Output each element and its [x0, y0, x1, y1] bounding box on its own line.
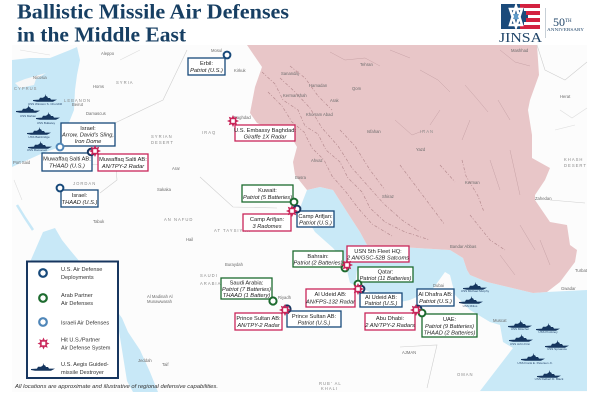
- callout: Saudi Arabia: Saudi Arabia:: [230, 280, 264, 286]
- map labels: Mosul: [211, 48, 222, 53]
- callout: Bahrain: Bahrain:: [307, 254, 329, 260]
- map labels: Tabuk: [93, 219, 105, 224]
- legend: U.S. Air Defense: [61, 267, 102, 273]
- markers: Kuwait: [286, 199, 300, 217]
- marker: Erbil: [224, 52, 230, 58]
- callout: USN 5th Fleet HQ: [346, 246, 409, 262]
- callout: Bahrain: [293, 251, 343, 267]
- map labels: Kirkuk: [234, 68, 247, 73]
- map labels: Isfahan: [367, 129, 381, 134]
- map labels: Kerman: [465, 180, 480, 185]
- map labels: Beirut: [72, 102, 84, 107]
- map labels: Dubai: [433, 283, 444, 288]
- callout: Abu Dhabi: Abu Dhabi:: [376, 316, 404, 322]
- map labels: KHASH: [564, 157, 583, 162]
- map labels: Riyadh: [278, 295, 292, 300]
- map labels: Taif: [162, 362, 169, 367]
- legend: Arab Partner: [61, 293, 93, 299]
- callout: Israel THAAD: [61, 190, 98, 207]
- map labels: DESERT: [564, 163, 587, 168]
- markers: Bahrain: [341, 259, 353, 271]
- callout: Israel THAAD: Israel:: [72, 193, 88, 199]
- callout: USN 5th Fleet HQ: USN 5th Fleet HQ:: [354, 249, 402, 255]
- callout: Erbil: Patriot (U.S.): [190, 68, 223, 74]
- callout: US Embassy Baghdad: U.S. Embassy Baghdad:: [234, 128, 296, 134]
- marker: Baghdad hit: [227, 115, 239, 127]
- callout: Prince Sultan radar: [235, 313, 282, 330]
- map labels: Yazd: [416, 147, 426, 152]
- map labels: IRAN: [420, 129, 434, 134]
- callout: Al Udeid Patriot: [360, 293, 402, 307]
- callout: Camp Arifjan Patriot: Camp Arifjan:: [298, 214, 333, 220]
- callout: Qatar: Patriot (11 Batteries): [360, 276, 411, 282]
- callout: Camp Arifjan radomes: 3 Radomes: [252, 224, 282, 230]
- map labels: AT TAYSIYAH: [214, 228, 251, 233]
- callout: Muwaffaq Salti radar: [98, 154, 148, 171]
- title: in the Middle East: [17, 22, 186, 46]
- map labels: Jeddah: [138, 358, 152, 363]
- map labels: AJMAN: [402, 350, 416, 355]
- legend: Deployments: [61, 275, 94, 281]
- map labels: Buraydah: [225, 262, 244, 267]
- ships: Gulf of Oman group: USS Spruance: [547, 347, 567, 351]
- legend: Israeli Air Defenses: [61, 320, 109, 326]
- map labels: Hamadan: [309, 83, 328, 88]
- map labels: SYRIAN: [151, 134, 173, 139]
- map labels: Port Said: [13, 160, 31, 165]
- callout: Al Udeid radar: [305, 289, 356, 307]
- map labels: LEBANON: [64, 98, 91, 103]
- callout: Kuwait: Patriot (5 Batteries): [243, 195, 292, 201]
- map labels: Arar: [172, 166, 181, 171]
- map labels: Tehran: [360, 62, 373, 67]
- callout: Erbil: Erbil:: [200, 61, 213, 67]
- marker: Saudi Arabia: [269, 297, 277, 305]
- map labels: AN NAFUD: [164, 217, 193, 222]
- ships: Mediterranean group: [16, 94, 62, 152]
- callout: USN 5th Fleet HQ: 2 AN/GSC-52B Satcoms: [346, 256, 409, 262]
- callout: Camp Arifjan radomes: Camp Arifjan:: [250, 217, 284, 223]
- callout: Qatar: [358, 267, 413, 282]
- callout: Prince Sultan Patriot: Patriot (U.S.): [298, 320, 331, 326]
- legend: U.S. Aegis Guided-: [61, 362, 109, 368]
- map labels: ARABIA: [200, 281, 221, 286]
- Mediterranean Sea: [12, 47, 80, 167]
- map labels: Turbat: [575, 268, 588, 273]
- footnote: All locations are approximate and illustrative of regional defensive capabilities.: [14, 384, 218, 390]
- logo: JINSA 50th anniversary: JINSA: [499, 30, 542, 45]
- callout: US Embassy Baghdad: [234, 125, 296, 141]
- map labels: IRAQ: [202, 130, 216, 135]
- map labels: Nicosia: [33, 75, 47, 80]
- callout: Al Udeid radar: AN/FPS-132 Radar: [305, 300, 356, 306]
- Iran terrain lines: [262, 66, 505, 250]
- map labels: SYRIA: [116, 80, 134, 85]
- markers: Prince Sultan: [279, 304, 291, 316]
- markers: Qatar: [352, 281, 364, 295]
- callout: Muwaffaq Salti radar: AN/TPY-2 Radar: [101, 164, 145, 170]
- callout: Al Dhafra: Patriot (U.S.): [419, 299, 452, 305]
- ships: Gulf of Oman group: [459, 282, 569, 381]
- ships: Mediterranean group: USS Bainbridge: [28, 135, 50, 139]
- map labels: Herat: [560, 94, 571, 99]
- callout: Camp Arifjan radomes: [243, 214, 291, 231]
- map labels: OMAN: [457, 372, 474, 377]
- callout: Muwaffaq Salti THAAD: Muwaffaq Salti AB:: [43, 156, 91, 162]
- callout: Muwaffaq Salti THAAD: THAAD (U.S.): [49, 164, 85, 170]
- map labels: Bahrain: [332, 262, 347, 267]
- callout: Israel Arrow: Iron Dome: [75, 139, 101, 145]
- callout: Saudi Arabia: THAAD (1 Battery): [223, 293, 270, 299]
- map labels: Al Madinah Al: [147, 294, 173, 299]
- callout: Kuwait: Kuwait:: [258, 188, 277, 194]
- callout: Kuwait: [242, 185, 293, 202]
- Persian Gulf and Gulf of Oman: [300, 187, 587, 391]
- callout: Camp Arifjan Patriot: Patriot (U.S.): [299, 220, 332, 226]
- map labels: DESERT: [151, 140, 174, 145]
- map labels: JORDAN: [73, 181, 96, 186]
- callout: Muwaffaq Salti THAAD: [42, 153, 92, 171]
- ships: Gulf of Oman group: USS Delbert D. Black: [535, 377, 564, 381]
- markers: UAE: [410, 304, 425, 316]
- callout: Al Dhafra: Al Dhafra AB:: [418, 292, 453, 298]
- ships: Gulf of Oman group: USS Mitscher: [511, 327, 529, 331]
- legend: missile Destroyer: [61, 370, 104, 376]
- callout: Al Udeid Patriot: Patriot (U.S.): [365, 301, 398, 307]
- title: [17, 0, 289, 46]
- map labels: Bandar Abbas: [450, 244, 476, 249]
- callout: UAE: [422, 314, 477, 337]
- map labels: KHALI: [321, 386, 338, 391]
- map labels: Homs: [93, 84, 104, 89]
- Cyprus: [15, 73, 46, 88]
- map labels: Sakaka: [157, 187, 172, 192]
- logo: JINSA 50th anniversary: 50: [553, 15, 565, 29]
- callout: Al Udeid Patriot: Al Udeid AB:: [365, 295, 397, 301]
- map labels: Basra: [295, 175, 307, 180]
- callout: Israel Arrow: Israel:: [80, 126, 96, 132]
- legend: [27, 262, 118, 378]
- Iran fine ridges: [330, 50, 550, 275]
- marker: Israel: [57, 144, 63, 150]
- ships: Gulf of Oman group: USS Frank E. Petersen Jr.: [517, 361, 553, 365]
- callout: UAE: Patriot (9 Batteries): [425, 324, 474, 330]
- marker: Israel THAAD: [57, 185, 63, 191]
- map labels: Aleppo: [101, 51, 115, 56]
- callout: Prince Sultan radar: Prince Sultan AB:: [236, 316, 281, 322]
- map labels: CYPRUS: [14, 86, 37, 91]
- callout: Al Udeid radar: Al Udeid AB:: [315, 292, 347, 298]
- legend: Hit U.S./Partner: [61, 338, 100, 344]
- title: Ballistic Missile Air Defenses: [17, 0, 289, 24]
- callout: UAE: UAE:: [443, 317, 457, 323]
- map labels: Gwadar: [561, 286, 576, 291]
- callout: Al Dhafra: [417, 289, 454, 306]
- map labels: Arak: [330, 98, 340, 103]
- map labels: Mashhad: [511, 48, 529, 53]
- callout: Qatar: Qatar:: [378, 270, 394, 276]
- callout: Saudi Arabia: Patriot (7 Batteries): [222, 287, 271, 293]
- marker: Muwaffaq Salti: [88, 145, 101, 157]
- callout: Saudi Arabia: [221, 278, 272, 299]
- map labels: Munawwarah: [147, 299, 173, 304]
- callout: Israel Arrow: Arrow, David's Sling,: [61, 132, 114, 138]
- map labels: RUB' AL: [319, 381, 342, 386]
- callout: Muwaffaq Salti radar: Muwaffaq Salti AB:: [99, 157, 147, 163]
- map labels: Hail: [186, 237, 193, 242]
- map labels: Qom: [352, 86, 362, 91]
- callout: Bahrain: Patriot (2 Batteries): [294, 260, 343, 266]
- callout: Abu Dhabi: 2 AN/TPY-2 Radars: [364, 323, 415, 329]
- Red Sea: [30, 228, 158, 392]
- ships: Mediterranean group: USS Roosevelt: [27, 148, 47, 152]
- callout: Prince Sultan Patriot: [287, 311, 341, 327]
- legend: Air Defense System: [61, 346, 111, 352]
- map labels: Shiraz: [382, 194, 394, 199]
- Iran: [247, 45, 577, 293]
- map labels: Zahedan: [535, 196, 552, 201]
- callout: Prince Sultan Patriot: Prince Sultan AB:: [292, 314, 337, 320]
- map labels: Kermanshah: [283, 93, 307, 98]
- map labels: Baghdad: [234, 115, 251, 120]
- map labels: Muscat: [493, 318, 507, 323]
- logo: JINSA 50th anniversary: TH: [565, 19, 572, 24]
- ships: Gulf of Oman group: USS John Finn: [510, 342, 530, 346]
- map labels: SAUDI: [200, 273, 218, 278]
- ships: Mediterranean group: USS Winston S. Churchill: [28, 102, 62, 106]
- logo: JINSA 50th anniversary: ANNIVERSARY: [547, 27, 584, 32]
- callout: Israel THAAD: THAAD (U.S.): [62, 200, 97, 206]
- callout: Israel Arrow: [61, 123, 115, 146]
- map labels: Sanandaj: [281, 71, 299, 76]
- map labels: Khorram Abad: [306, 112, 333, 117]
- logo: JINSA 50th anniversary: [499, 4, 584, 45]
- ships: Gulf of Oman group: USS Michael Murphy: [461, 289, 490, 293]
- map labels: Damascus: [86, 111, 106, 116]
- ships: Mediterranean group: USS Mahan: [20, 114, 36, 118]
- map labels: Ahvaz: [311, 158, 323, 163]
- ships: Gulf of Oman group: USS Pinckney: [538, 330, 558, 334]
- ships: Mediterranean group: USS Bulkeley: [37, 121, 56, 125]
- legend: Air Defenses: [61, 301, 93, 307]
- callout: Camp Arifjan Patriot: [297, 211, 334, 227]
- callout: Prince Sultan radar: AN/TPY-2 Radar: [236, 323, 281, 329]
- callout: US Embassy Baghdad: Giraffe 1X Radar: [244, 134, 287, 140]
- Gulf of Suez: [17, 205, 33, 230]
- callout: Erbil: [188, 58, 225, 75]
- callout: UAE: THAAD (2 Batteries): [424, 330, 476, 336]
- callout: Abu Dhabi: [364, 313, 415, 330]
- ships: Gulf of Oman group: USS Milius: [463, 304, 478, 308]
